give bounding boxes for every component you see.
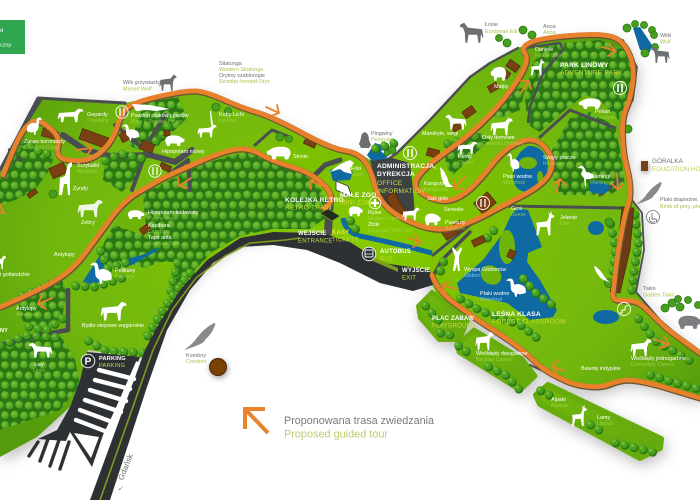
label: maned wolf: Maned Wolf (123, 86, 152, 92)
label: administration (377, 163, 436, 195)
label: condors (186, 353, 207, 365)
label: llamas: Lamy (597, 415, 610, 421)
label: sitatunga and oryx: Western Sitatunga (219, 67, 263, 73)
label: birds and reptiles pavilion: Pawilon ptaków i gadów (131, 113, 189, 119)
label: flamingos (590, 174, 614, 186)
label: pygmy hippo, capybara, tapir: Tapir anta (148, 235, 172, 241)
label: playground (432, 316, 476, 330)
animal: maned wolf (159, 75, 177, 91)
label: giraffes: Żyrafy (73, 185, 88, 192)
label: meerkats: Surykatki (77, 163, 99, 169)
label: mini zoo (340, 192, 376, 206)
label: pygmy hippo, capybara, tapir: Pygmy Hippo (148, 216, 178, 222)
tree rows (0, 117, 699, 453)
icon: retro train (320, 209, 340, 221)
label: flamingos: Flamingos (590, 180, 614, 186)
label: baboons: Pawiany (445, 220, 466, 226)
label: lynx and wild cats: European Wild Cats (368, 228, 413, 234)
animal: peccary (579, 98, 601, 109)
education house building (641, 161, 648, 171)
label: sitatunga and oryx (219, 61, 270, 85)
label: education house (652, 156, 700, 173)
label: administration: INFORMATION (377, 188, 425, 195)
animal: secretary bird (122, 124, 139, 140)
label: crowned crane: Żuraw koroniasty (24, 138, 65, 145)
label: bus: BUS (380, 256, 393, 262)
label: fallow deer: Daniele (535, 47, 553, 53)
label: wolves: Wolf (660, 40, 671, 46)
label: gdansk direction (113, 452, 135, 494)
label: dromedaries: Dromedary Camels (631, 362, 675, 368)
label: mini zoo: MINI ZOO (340, 200, 372, 206)
parking lot (29, 352, 140, 469)
label: entrance: WEJŚCIE (298, 230, 326, 237)
animal: monkey (491, 67, 506, 81)
label: dromedaries (631, 356, 686, 368)
administration plaza (370, 158, 415, 215)
label: condors: Kondory (186, 353, 206, 359)
label: fallow deer (535, 47, 562, 59)
label: european elk: Łosie (485, 22, 498, 28)
animal: waterfowl (507, 153, 519, 172)
icon: parking: P (85, 356, 92, 368)
label: antelopes west: Antelopes (16, 312, 39, 318)
label: seals: Foki (351, 166, 361, 172)
label: dromedaries: Wielbłądy jednogarbne (631, 356, 686, 362)
label: pelicans: Pelicans (115, 274, 134, 280)
label: maned wolf (123, 80, 160, 92)
animal: hungarian cattle (101, 302, 127, 320)
label: birds and reptiles pavilion (131, 113, 189, 125)
internal grey footpaths (0, 43, 625, 345)
label: raccoons: Szopy pracze (543, 155, 576, 161)
label: wolves: Wilki (660, 33, 671, 39)
animal: sheep at left edge (0, 256, 6, 269)
label: monkeys: Małpy (494, 84, 509, 90)
label: crowned crane: Crowned Crane (24, 145, 59, 151)
label: pygmy hippo, capybara, tapir: Kapibara (148, 223, 170, 229)
label: domestic donkeys (482, 135, 524, 147)
lake and pond islands (477, 157, 543, 289)
label: elephants: Słonie (293, 154, 308, 160)
label: waterfowl lake (480, 291, 509, 303)
label: lechwe (219, 112, 244, 124)
label: takin: Takin (643, 286, 656, 292)
label: retro train: KOLEJKA RETRO (285, 197, 344, 204)
animal: wolf, grey (651, 47, 670, 63)
animal: giraffe (59, 162, 72, 195)
animal: fallow deer (531, 58, 544, 75)
icon: first aid (369, 197, 381, 209)
animal: penguin (359, 132, 371, 148)
icon: wheelchair access (646, 210, 660, 224)
label: parking: PARKING (99, 363, 125, 369)
animal: mandrill (446, 115, 466, 130)
label: pumas: Pumy (458, 154, 472, 160)
animal: seal (330, 160, 354, 174)
icon: stairs (618, 302, 630, 316)
legend: proposed guided tour (245, 409, 435, 440)
icon: toilets, adventure park (614, 82, 626, 94)
animal: elephant (267, 147, 291, 159)
animal: cheetah (58, 109, 84, 122)
label: zebras: Zebry (81, 220, 95, 226)
guided tour routes (0, 34, 700, 399)
label: servals: Serwale (444, 207, 463, 213)
icon: mini zoo gate (336, 181, 352, 197)
main road (90, 232, 433, 500)
icon: parking (81, 354, 95, 368)
label: playground: PLAC ZABAW (432, 316, 474, 322)
label: alpacas (551, 397, 569, 409)
label: takin: Golden Takin (643, 292, 674, 298)
animal: bison (678, 316, 700, 329)
label: adventure park: PARK LINOWY (560, 62, 609, 69)
animal: oryx (198, 111, 216, 138)
label: exit (402, 267, 430, 282)
bus lay-by island (368, 255, 398, 272)
label: gotland sheep: i gotlandzkie (0, 272, 30, 278)
legend text (284, 415, 435, 440)
label: waterfowl north: Waterfowl (503, 180, 525, 186)
animal: zebra (78, 200, 103, 217)
route direction arrows (0, 44, 669, 373)
label: exit: EXIT (402, 276, 416, 282)
buildings (27, 59, 634, 293)
animal: deer (536, 211, 554, 235)
label: sitatunga and oryx: Sitatunga (219, 61, 242, 67)
label: bus: AUTOBUS (380, 249, 411, 255)
label: kangaroos (424, 181, 449, 193)
label: parking: PARKING (99, 356, 126, 362)
label: kangaroos: Kangaroos (424, 187, 449, 193)
label: domestic donkeys: Domestic Donkeys (482, 141, 524, 147)
label: seals: Seals (351, 172, 364, 178)
animal: bird of prey (636, 182, 662, 204)
green info tab, top left: d (0, 28, 3, 34)
label: fallow deer: Fallow Deer (535, 53, 562, 59)
label: peccaries: Peccaries (595, 115, 617, 121)
label: antelopes: Antylopy (54, 252, 75, 258)
animal: flamingo (578, 166, 594, 186)
label: raccoons: Raccoons (543, 161, 566, 167)
icon: toilets, administration (404, 146, 416, 160)
label: geese: Gęsi (511, 206, 522, 212)
label: waterfowl north (503, 174, 532, 186)
animal: llama (572, 405, 587, 426)
label: takin (643, 286, 674, 298)
label: gdansk direction: ← (113, 480, 127, 494)
label: crowned crane (24, 138, 65, 151)
label: bactrian camels: Wielbłądy dwugarbne (476, 351, 528, 357)
label: lechwe: Lechwe (219, 118, 236, 124)
green info tab, top left: czny (0, 42, 12, 48)
label: sitatunga and oryx: Oryksy szablorogie (219, 73, 265, 79)
label: parking (99, 356, 126, 369)
label: mandrills: Mandryle, wegi (422, 131, 458, 137)
decorative log: condor aviary (210, 358, 226, 376)
label: penguins: Penguins (371, 137, 394, 143)
label: waterfowl north: Ptaki wodne (503, 174, 532, 180)
label: lynx and wild cats: Northern Lynx (368, 216, 400, 222)
label: anoa (543, 24, 556, 36)
label: pelicans: Pelikany (115, 268, 136, 274)
animal: gibbon (452, 247, 462, 271)
label: bus (380, 249, 411, 262)
label: geese: Geese (511, 212, 526, 218)
label: adventure park (560, 62, 623, 76)
label: water buffalo: Bawoły indyjskie (581, 366, 621, 372)
forest blocks (0, 40, 633, 430)
animal: hippo (165, 135, 185, 146)
label: pygmy hippo, capybara, tapir: Brazilian Tapir (148, 241, 180, 247)
label: waterfowl lake: Waterfowl (480, 297, 502, 303)
label: llamas: Llamas (597, 421, 614, 427)
label: condors: Condors (186, 359, 207, 365)
animal: dromedary (631, 339, 651, 356)
label: fragment at left edge: NY (0, 328, 8, 334)
animal: pelican (90, 263, 112, 284)
label: forest classroom (492, 309, 566, 326)
scattered single trees (49, 20, 700, 312)
label: anoa: Anoa (543, 30, 556, 36)
route outline (0, 35, 700, 399)
label: kangaroos: Kangury (424, 181, 444, 187)
label: peccaries (595, 109, 617, 121)
label: sitatunga and oryx: Scimitar-horned Oryx (219, 79, 270, 85)
label: pygmy hippo, capybara, tapir: Hipopotam karłowaty (148, 210, 199, 216)
label: deer (560, 215, 577, 227)
label: mini zoo: MAŁE ZOO (340, 192, 376, 199)
label: anoa: Anoa (543, 24, 556, 30)
water: lakes and ponds (82, 27, 652, 324)
label: antelopes west: Antylopy (16, 306, 37, 312)
label: domestic donkeys: Osły domowe (482, 135, 515, 141)
label: peccaries: Pekari (595, 109, 610, 115)
label: playground: PLAYGROUND (432, 324, 476, 330)
label: entrance: ENTRANCE (298, 238, 333, 244)
label: penguins (371, 131, 394, 143)
label: lynx and wild cats: Rysie (368, 210, 381, 216)
label: nile hippo: Hipopotam nilowy (162, 149, 205, 155)
label: deer: Jelenie (560, 215, 577, 221)
label: exit: WYJŚCIE (402, 267, 430, 274)
label: raccoons (543, 155, 576, 167)
green info tab, top left (0, 20, 25, 54)
label: meerkats: Meerkats (77, 169, 98, 175)
animal: sheep at mini zoo (349, 206, 363, 216)
animal: lion (29, 343, 52, 358)
animal: puma (458, 142, 477, 154)
animal: pygmy hippo (128, 210, 145, 219)
animal: eagle (594, 266, 610, 282)
label: lynx and wild cats: Żbiki (368, 221, 379, 228)
icon: restaurant, centre (149, 165, 161, 177)
label: gibbon island (464, 267, 506, 279)
label: retro train (285, 197, 344, 212)
label: waterfowl lake: Ptaki wodne (480, 291, 509, 297)
label: education house: GÓRALKA (652, 156, 684, 165)
label: tickets: TICKETS (332, 238, 359, 244)
label: european elk: European Elk (485, 29, 518, 35)
label: maned wolf: Wilk grzywiasty (123, 80, 160, 86)
animal: crowned crane (27, 117, 42, 135)
label: entrance (298, 230, 333, 244)
label: baboons (445, 220, 466, 232)
label: baboons: Baboons (445, 226, 465, 232)
label: pumas (458, 154, 474, 166)
label: penguins: Pingwiny (371, 131, 393, 137)
label: wolves (660, 33, 671, 46)
route fill (0, 34, 700, 398)
animal: bactrian camel (475, 332, 493, 350)
road centre stripe (100, 238, 300, 500)
icon: bus (362, 247, 376, 261)
label: forest classroom: LEŚNA KLASA (492, 309, 541, 318)
label: cheetahs (87, 112, 109, 124)
animal: sheep (425, 214, 441, 225)
label: administration: OFFICE (377, 180, 403, 187)
label: llamas (597, 415, 614, 427)
label: gibbon island: Gibbon (464, 273, 480, 279)
dark park border edges (0, 33, 700, 386)
label: yaks: Jaki góle (427, 196, 448, 202)
label: administration: ADMINISTRACJA, (377, 163, 436, 170)
label: geese (511, 206, 526, 218)
label: birds of prey (660, 197, 700, 210)
label: lions (33, 362, 45, 374)
animal: european elk (460, 23, 483, 43)
animal: crocodile (132, 104, 170, 111)
legend text: Proponowana trasa zwiedzania (284, 415, 435, 427)
label: pelicans (115, 268, 136, 280)
label: lions: Lions (33, 368, 45, 374)
label: lynx and wild cats (368, 210, 413, 234)
label: administration: DYREKCJA (377, 171, 415, 178)
label: european elk (485, 22, 518, 35)
label: cheetahs: Gepardy (87, 112, 108, 118)
label: alpacas: Alpaki (551, 397, 566, 403)
label: tickets: KASY (332, 230, 349, 236)
label: lions: Lwy (34, 362, 44, 368)
label: alpacas: Alpacas (551, 403, 569, 409)
label: gibbon island: Wyspa Gibbonów (464, 267, 506, 273)
label: retro train: RETRO TRAIN (285, 204, 332, 212)
animal: goose (506, 278, 526, 297)
label: meerkats (77, 163, 99, 175)
label: flamingos: Flamingi (590, 174, 610, 180)
legend arrow (245, 409, 268, 433)
label: birds of prey: Ptaki drapieżne, (660, 197, 699, 203)
label: forest classroom: FOREST CLASSROOM (492, 318, 566, 326)
animal: condor (184, 323, 216, 350)
label: pumas: Dholes (458, 160, 474, 166)
label: bactrian camels (476, 351, 528, 363)
label: bactrian camels: Bactrian Camels (476, 357, 513, 363)
label: deer: Deer (560, 221, 571, 227)
label: adventure park: ADVENTURE PARK (560, 70, 623, 76)
label: seals (351, 166, 364, 178)
label: gdansk direction: Gdańsk (116, 452, 135, 482)
label: antelopes west (16, 306, 39, 318)
legend text: Proposed guided tour (284, 428, 388, 440)
label: cheetahs: Cheetahs (87, 118, 109, 124)
label: birds and reptiles pavilion: Birds & Reptiles House (131, 119, 183, 125)
label: pygmy hippo, capybara, tapir: Capybara (148, 229, 170, 235)
icon: restaurant, pavilion (116, 106, 128, 118)
label: hungarian cattle: Bydło stepowe węgierskie (82, 323, 144, 329)
label: lechwe: Koby Lichi (219, 112, 244, 118)
label: tickets (332, 230, 359, 244)
label: pygmy hippo, capybara, tapir (148, 210, 199, 247)
animal: kangaroo (440, 167, 453, 187)
light clearings (115, 95, 618, 237)
animal: wolf at mini zoo (402, 208, 420, 221)
animal: domestic donkey (491, 118, 513, 135)
icon: restaurant, east (476, 196, 490, 210)
